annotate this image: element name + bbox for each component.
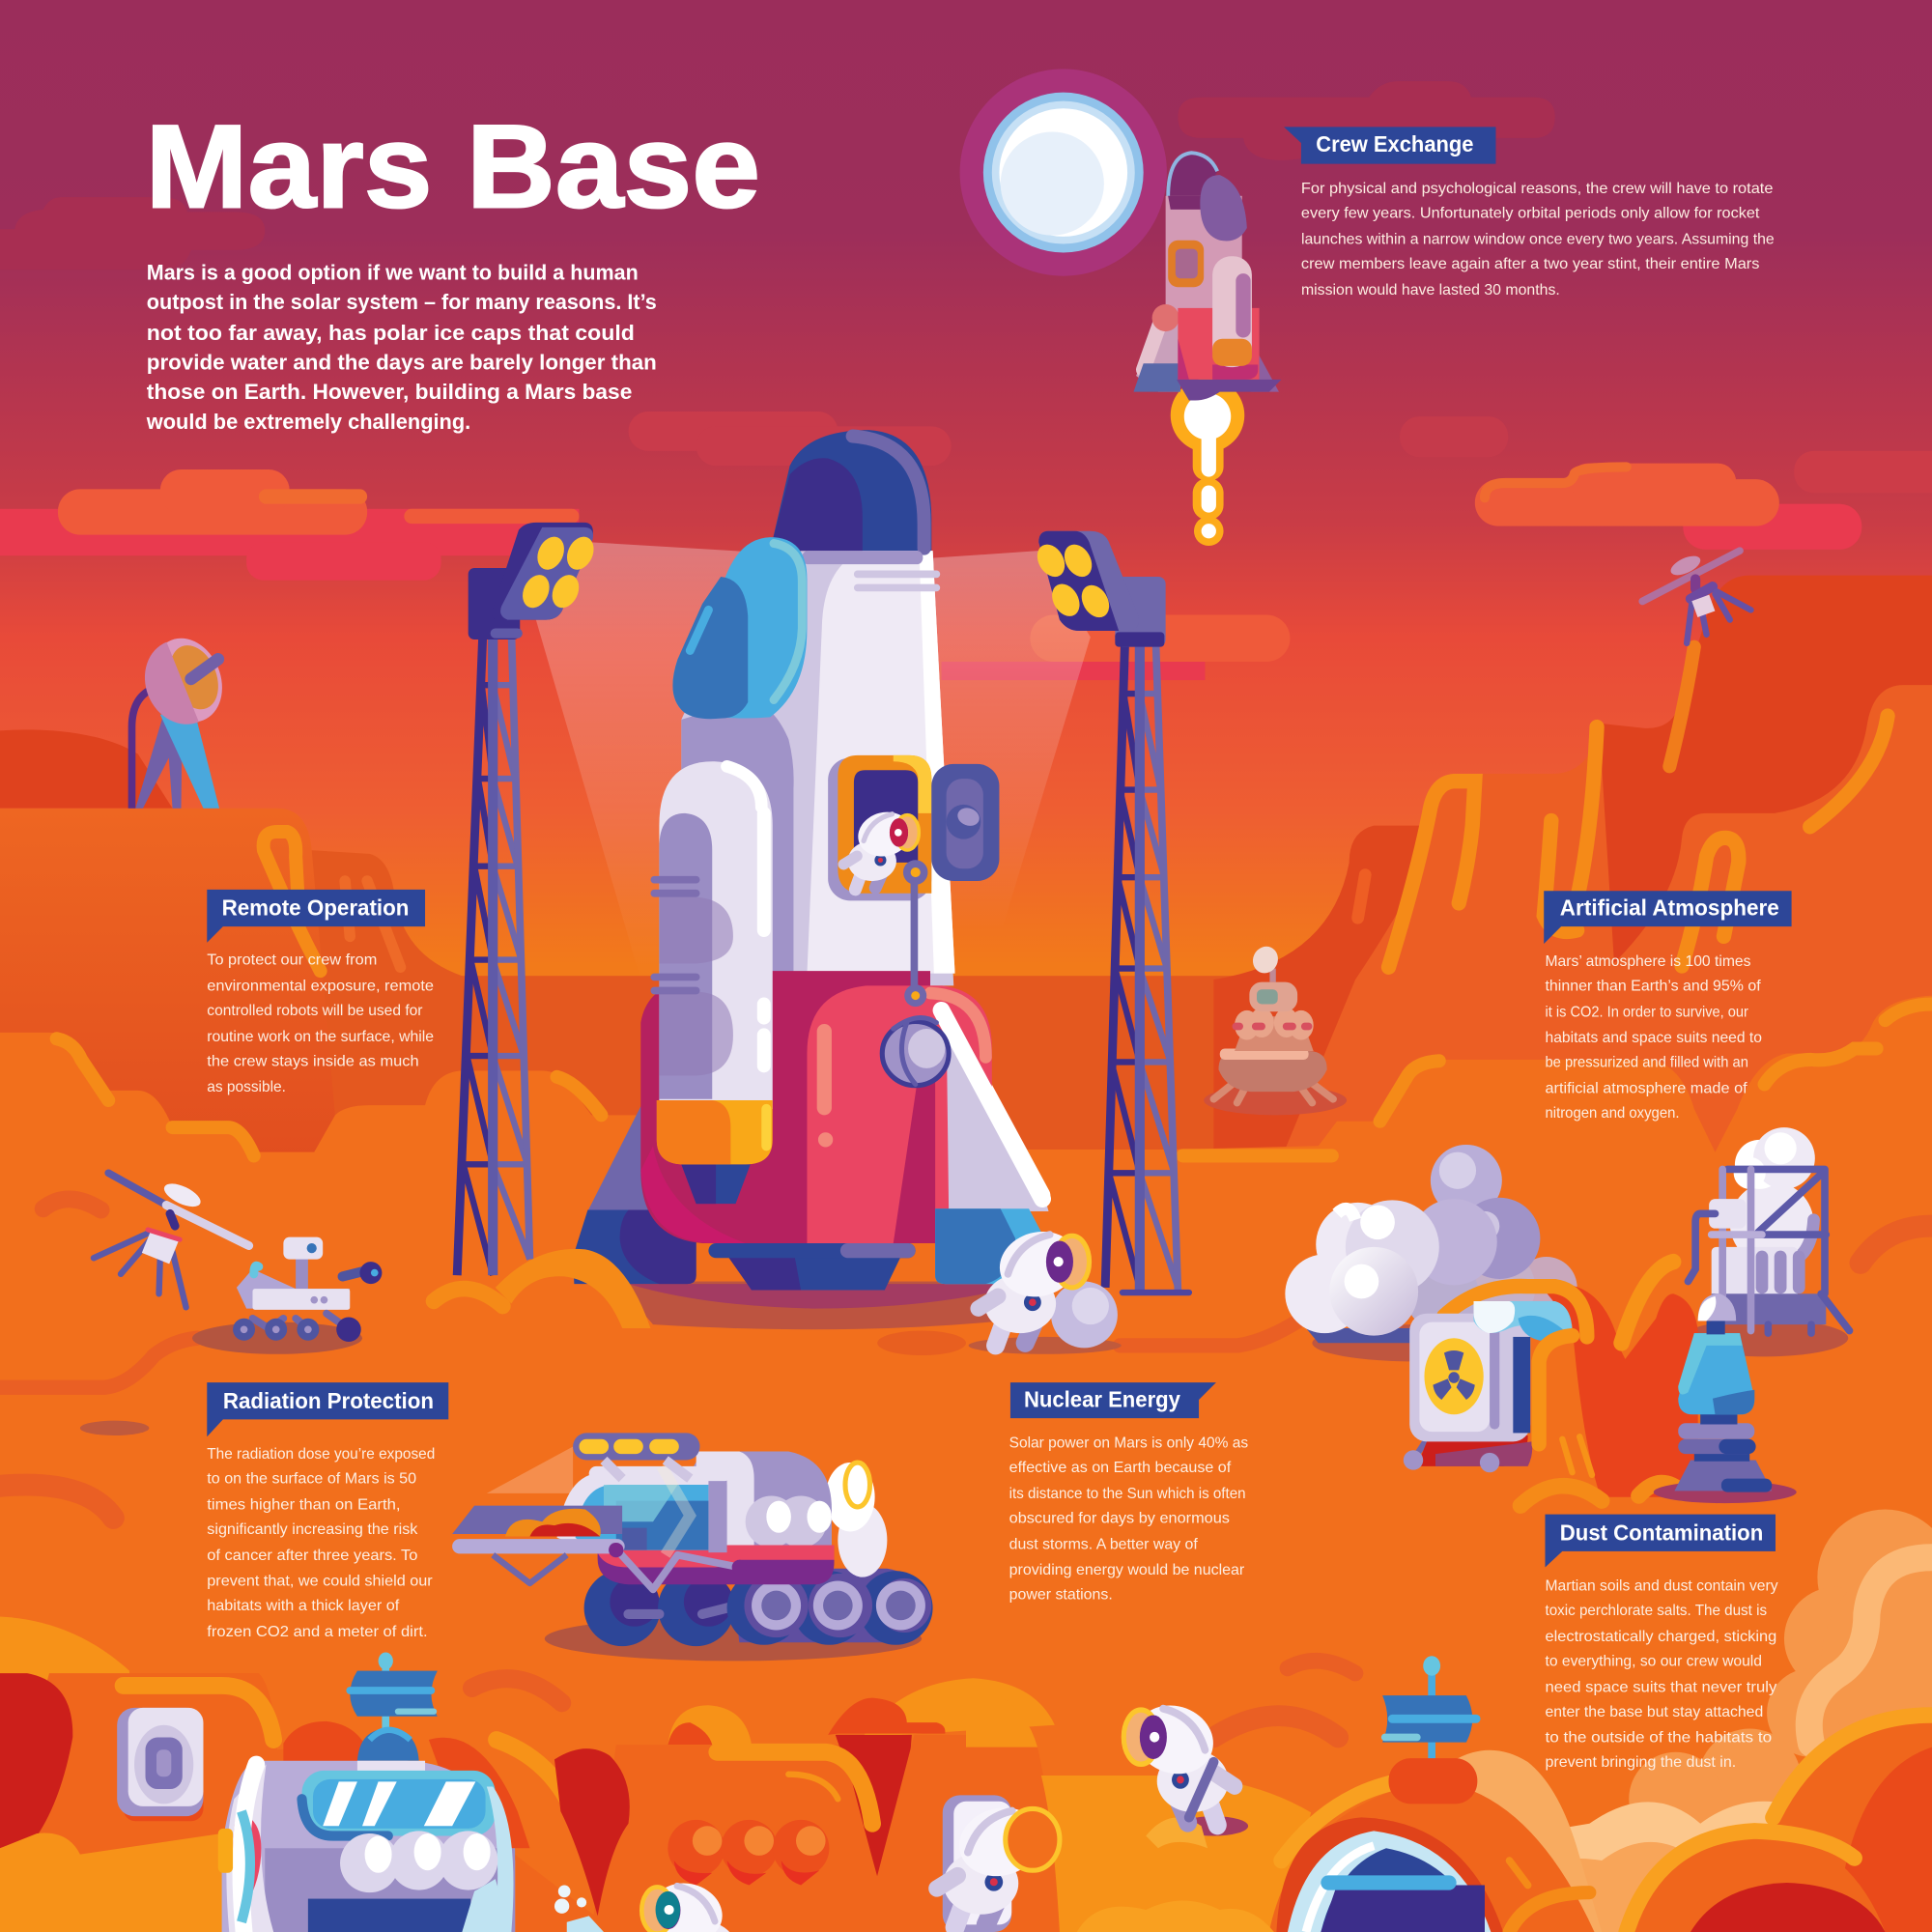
far hill left xyxy=(0,729,173,809)
dust contamination text: need space suits that never truly xyxy=(1545,1678,1776,1695)
drone and small rover left xyxy=(94,1173,382,1354)
intro paragraph: provide water and the days are barely longer than xyxy=(147,351,657,375)
crane hook and ball xyxy=(882,860,949,1086)
artificial atmosphere heading: Artificial Atmosphere xyxy=(1560,895,1779,921)
yellow dunes foreground xyxy=(1077,1900,1274,1932)
radiation protection text xyxy=(207,1445,435,1640)
flying drone upper right xyxy=(1642,551,1750,643)
spotlight beams xyxy=(536,542,1091,980)
small rover xyxy=(192,1237,382,1354)
domes and strips mid bottom xyxy=(668,1678,1055,1932)
left booster xyxy=(654,761,773,1204)
artificial atmosphere text: be pressurized and filled with an xyxy=(1545,1054,1748,1071)
lander in the distance xyxy=(1204,943,1347,1115)
red lower hull xyxy=(640,971,1051,1284)
radiation protection text: prevent that, we could shield our xyxy=(207,1573,433,1590)
rover scoop xyxy=(452,1506,747,1589)
remote operation heading xyxy=(207,890,425,943)
astronaut walking xyxy=(1123,1696,1248,1848)
dust contamination text: to everything, so our crew would xyxy=(1545,1652,1762,1669)
radiation protection text: significantly increasing the risk xyxy=(207,1520,418,1538)
ice chunks xyxy=(554,1886,604,1932)
astronaut with boulder xyxy=(969,1223,1122,1354)
bottom left hill xyxy=(0,1616,135,1848)
large dome habitat xyxy=(1269,1758,1595,1932)
radiation protection text: times higher than on Earth, xyxy=(207,1495,401,1513)
nuclear energy text: providing energy would be nuclear xyxy=(1009,1561,1245,1578)
rocket ground shadow xyxy=(616,1282,1047,1329)
radioactive waste container xyxy=(1404,1262,1673,1475)
mesa arch right of capsule xyxy=(429,1738,974,1932)
ground ridge highlights xyxy=(57,1005,1932,1155)
dust contamination text xyxy=(1545,1577,1778,1771)
lamp tower xyxy=(1654,1293,1797,1503)
intro paragraph: outpost in the solar system – for many reasons. It’s xyxy=(147,290,657,314)
remote operation text: To protect our crew from xyxy=(207,952,377,969)
wall hatch left xyxy=(117,1708,203,1821)
remote operation text: controlled robots will be used for xyxy=(207,1002,423,1019)
radiation protection text: The radiation dose you’re exposed xyxy=(207,1445,435,1463)
intro paragraph: not too far away, has polar ice caps that could xyxy=(147,321,635,345)
nuclear energy text: power stations. xyxy=(1009,1586,1113,1604)
wall hatch and astronaut bottom xyxy=(937,1795,1060,1932)
nose cone xyxy=(770,430,931,551)
artificial atmosphere text: thinner than Earth’s and 95% of xyxy=(1545,978,1761,995)
dunes around lamp xyxy=(1520,1483,1683,1506)
dust clouds right xyxy=(1428,1509,1932,1932)
radiation protection text: to on the surface of Mars is 50 xyxy=(207,1470,416,1488)
intro paragraph: Mars is a good option if we want to build a human xyxy=(147,261,639,285)
intro paragraph: those on Earth. However, building a Mars base xyxy=(147,380,632,404)
left fin xyxy=(573,1106,696,1284)
dust contamination text: electrostatically charged, sticking xyxy=(1545,1628,1776,1645)
headlight beam xyxy=(487,1446,573,1493)
nuclear energy heading: Nuclear Energy xyxy=(1024,1387,1180,1412)
right tank on frame xyxy=(1681,1127,1850,1356)
intro paragraph xyxy=(146,261,657,434)
artificial atmosphere heading xyxy=(1544,891,1792,944)
crew exchange text: every few years. Unfortunately orbital periods only allow for rocket xyxy=(1301,205,1760,222)
dust contamination text: enter the base but stay attached xyxy=(1545,1703,1763,1720)
dust contamination text: Martian soils and dust contain very xyxy=(1545,1577,1778,1595)
remote operation text: as possible. xyxy=(207,1078,286,1095)
ground shadows xyxy=(80,1331,966,1435)
crew exchange text: launches within a narrow window once every two years. Assuming the xyxy=(1301,231,1775,248)
capsule habitat xyxy=(218,1761,515,1932)
dust contamination heading xyxy=(1545,1515,1776,1567)
boulder cluster xyxy=(1285,1145,1577,1361)
crew exchange text: mission would have lasted 30 months. xyxy=(1301,281,1560,298)
nuclear energy text xyxy=(1009,1435,1248,1604)
clouds: red and orange horizon clouds xyxy=(0,464,1861,680)
rocket fins and base xyxy=(1133,304,1282,401)
panel: nuclear energy xyxy=(1009,1382,1248,1604)
hull xyxy=(681,551,953,985)
remote operation text: environmental exposure, remote xyxy=(207,978,434,995)
intro paragraph: would be extremely challenging. xyxy=(146,410,470,434)
crew exchange heading xyxy=(1284,127,1495,164)
nuclear energy text: dust storms. A better way of xyxy=(1009,1535,1198,1552)
dust contamination text: toxic perchlorate salts. The dust is xyxy=(1545,1602,1767,1619)
antenna flag left xyxy=(350,1652,438,1761)
artificial atmosphere text xyxy=(1545,952,1762,1122)
left plateau xyxy=(296,850,462,1115)
satellite dish xyxy=(131,628,235,809)
right plateaus xyxy=(1213,685,1932,1158)
panel: crew exchange xyxy=(1284,127,1775,298)
antenna flag right xyxy=(1382,1656,1476,1765)
nuclear energy heading xyxy=(1010,1382,1216,1418)
panel: remote operation xyxy=(207,890,434,1095)
crew exchange heading: Crew Exchange xyxy=(1316,131,1474,156)
artificial atmosphere text: habitats and space suits need to xyxy=(1545,1029,1762,1046)
astronaut in hatch xyxy=(843,807,919,890)
crew exchange text: crew members leave again after a two year stint, their entire Mars xyxy=(1301,255,1759,272)
remote operation text: the crew stays inside as much xyxy=(207,1052,419,1069)
nuclear energy text: obscured for days by enormous xyxy=(1009,1510,1230,1527)
flying drone xyxy=(94,1173,249,1307)
yellow ground lower middle xyxy=(966,1685,1311,1932)
left spotlight head xyxy=(469,523,599,639)
radiation protection text: of cancer after three years. To xyxy=(207,1547,417,1564)
big rover xyxy=(452,1433,933,1661)
radiation protection text: frozen CO2 and a meter of dirt. xyxy=(207,1623,428,1640)
canyon streaks xyxy=(264,647,1888,971)
dust crescents and ground waves xyxy=(0,1199,1932,1737)
radiation symbol xyxy=(1433,1350,1475,1400)
radiation protection heading: Radiation Protection xyxy=(223,1388,434,1413)
artificial atmosphere text: nitrogen and oxygen. xyxy=(1545,1104,1680,1122)
remote operation heading: Remote Operation xyxy=(222,895,409,921)
clouds: upper sky xyxy=(0,81,1932,493)
hull collar lines xyxy=(802,551,940,591)
rover rear astronaut xyxy=(826,1463,887,1577)
nuclear energy text: Solar power on Mars is only 40% as xyxy=(1009,1435,1248,1452)
hatch window xyxy=(828,755,931,900)
nuclear energy text: effective as on Earth because of xyxy=(1009,1459,1232,1476)
crew exchange text xyxy=(1301,180,1775,298)
flame xyxy=(1171,379,1244,546)
remote operation text xyxy=(207,952,434,1095)
bottom mesa left xyxy=(0,1673,616,1932)
right domes xyxy=(1509,1710,1932,1932)
foreground ground xyxy=(0,996,1932,1932)
moon xyxy=(960,69,1167,276)
panel: radiation protection xyxy=(207,1382,448,1640)
right fin xyxy=(930,1007,1051,1284)
dust contamination text: to the outside of the habitats to xyxy=(1545,1729,1772,1747)
astronaut bottom partial xyxy=(641,1876,742,1932)
right light tower xyxy=(1105,635,1189,1293)
horizon band xyxy=(370,976,1355,1154)
main rocket xyxy=(573,430,1051,1329)
remote operation text: routine work on the surface, while xyxy=(207,1028,434,1045)
artificial atmosphere text: artificial atmosphere made of xyxy=(1545,1079,1747,1096)
lava flow xyxy=(1540,1285,1698,1497)
dust contamination heading: Dust Contamination xyxy=(1560,1520,1763,1545)
small rocket in flight xyxy=(1133,153,1282,546)
dust contamination text: prevent bringing the dust in. xyxy=(1545,1753,1736,1771)
rover cab xyxy=(557,1452,835,1584)
panel: artificial atmosphere xyxy=(1544,891,1792,1122)
far mesa right xyxy=(1528,576,1932,1060)
artificial atmosphere text: it is CO2. In order to survive, our xyxy=(1545,1003,1749,1020)
panel: dust contamination xyxy=(1545,1515,1778,1771)
left light tower xyxy=(457,629,529,1275)
blue capsule xyxy=(672,537,807,719)
rover light bar xyxy=(573,1433,699,1479)
artificial atmosphere text: Mars’ atmosphere is 100 times xyxy=(1545,952,1750,970)
rear wheels xyxy=(584,1569,933,1646)
dune at left tower base xyxy=(434,1249,650,1328)
radiation protection heading xyxy=(207,1382,448,1436)
engine xyxy=(708,1243,916,1290)
crew exchange text: For physical and psychological reasons, the crew will have to rotate xyxy=(1301,180,1774,197)
nuclear energy text: its distance to the Sun which is often xyxy=(1009,1485,1246,1502)
open door xyxy=(931,764,999,881)
title: Mars Base xyxy=(146,99,760,232)
right spotlight head xyxy=(1032,531,1166,647)
radiation protection text: habitats with a thick layer of xyxy=(207,1597,400,1614)
red spheres xyxy=(668,1820,829,1886)
